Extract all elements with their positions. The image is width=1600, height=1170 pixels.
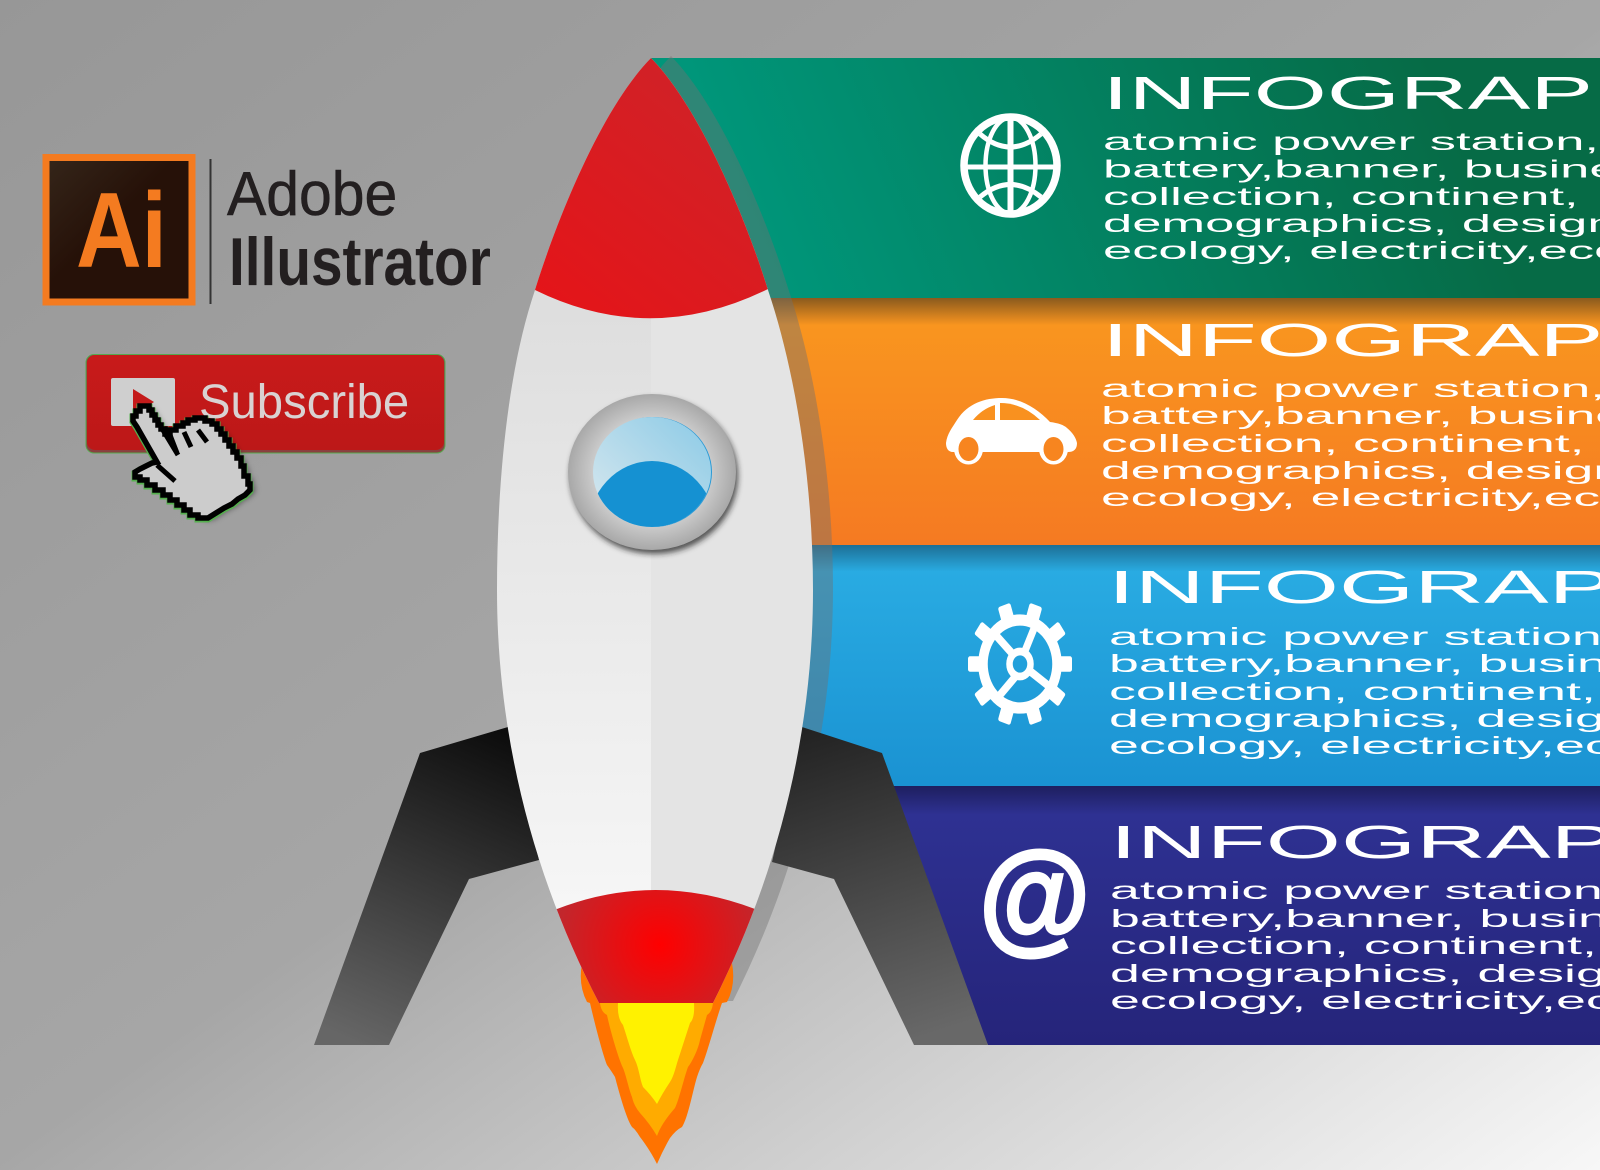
panel: navy band [868, 786, 1600, 1045]
rocket body [497, 58, 813, 1003]
icon: globe [964, 117, 1057, 214]
left leg [314, 727, 539, 1045]
icon: car [946, 398, 1077, 464]
button face [87, 355, 444, 450]
body text: orange: atomic power station, [1101, 374, 1600, 402]
finger lines [149, 407, 207, 481]
middle flame [600, 1003, 713, 1136]
porthole glass rim [594, 417, 712, 527]
porthole glass [593, 417, 711, 527]
panel: orange band [740, 298, 1600, 545]
right leg [772, 727, 988, 1045]
blue band background [795, 545, 1600, 786]
subscribe button [86, 354, 445, 453]
icon: gear [968, 603, 1072, 725]
cursor green edge [133, 407, 250, 519]
divider [210, 159, 212, 304]
Ai letters: Ai [76, 171, 167, 291]
button edge [86, 354, 445, 453]
green band background [651, 58, 1600, 298]
rocket shadow [517, 56, 833, 1001]
outer flame [581, 963, 733, 1164]
body text: green: atomic power station, [1103, 128, 1599, 155]
orange band background [740, 298, 1600, 545]
Illustrator wordmark: Illustrator [229, 224, 491, 300]
play triangle [133, 389, 154, 415]
subscribe label: Subscribe [199, 376, 409, 429]
icon: hand cursor [133, 406, 255, 520]
panel: green band [651, 58, 1600, 298]
panel: blue band [795, 545, 1600, 786]
Ai badge [46, 158, 192, 302]
inner flame [618, 1003, 694, 1104]
flame [581, 963, 733, 1164]
navy band background [868, 786, 1600, 1045]
Adobe wordmark: Adobe [227, 159, 397, 228]
cursor outline and fill [133, 406, 250, 518]
nose cone [535, 58, 768, 318]
body text: orange: collection, continent, [1101, 429, 1584, 457]
body text: navy: collection, continent, [1110, 931, 1597, 959]
body text: blue: collection, continent, [1109, 677, 1596, 705]
body left half [490, 58, 651, 1008]
body right half [651, 58, 821, 1008]
tail section [556, 890, 754, 1003]
porthole ring [568, 394, 736, 550]
icon: at sign: @ [977, 829, 1089, 967]
rocket [314, 40, 988, 1164]
cursor shadow [138, 408, 255, 520]
porthole shadow [570, 398, 738, 554]
porthole water [598, 461, 706, 527]
play box [111, 378, 175, 426]
logo: Adobe Illustrator [46, 158, 491, 304]
porthole [566, 394, 742, 558]
body text: green: collection, continent, [1103, 183, 1579, 210]
